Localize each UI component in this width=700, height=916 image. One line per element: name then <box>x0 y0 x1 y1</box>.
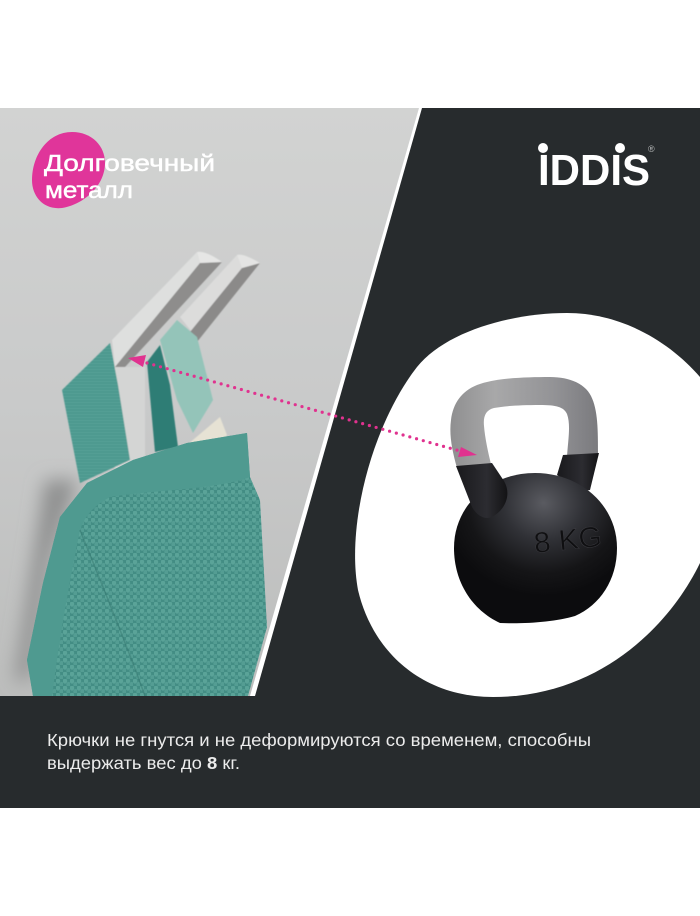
light strap <box>160 320 213 433</box>
towel top hem <box>27 433 250 696</box>
wall <box>0 108 420 696</box>
pink blob behind heading <box>32 132 105 208</box>
white blob with kettlebell <box>355 313 700 697</box>
kettlebell left sleeve <box>456 463 507 518</box>
dotted double-headed arrow <box>128 355 477 457</box>
logo IDDIS: IDDIS <box>538 146 650 195</box>
dark panel <box>0 108 700 808</box>
heading: металл <box>45 177 133 203</box>
towel body <box>27 433 267 696</box>
cream towel fold <box>190 417 227 442</box>
white diagonal divider <box>248 108 422 696</box>
back hook <box>180 255 260 342</box>
blob <box>355 313 700 697</box>
kettlebell handle <box>450 377 598 468</box>
photo: hooks with towel <box>0 108 420 696</box>
description text <box>47 730 591 773</box>
kettlebell right sleeve <box>557 453 599 491</box>
heading: Долговечный <box>44 150 215 176</box>
dark strap <box>147 345 178 452</box>
heading <box>44 150 215 203</box>
front hook <box>112 252 222 487</box>
description text: выдержать вес до 8 кг. <box>47 753 240 773</box>
logo IDDIS: ® <box>648 144 655 154</box>
wall soft shadow <box>15 480 78 680</box>
hooks and straps <box>62 252 260 487</box>
kettlebell weight label: 8 KG <box>532 521 603 560</box>
left strap <box>62 343 130 483</box>
towel inner crease <box>80 530 145 696</box>
icon: kettlebell <box>450 377 617 623</box>
description text: Крючки не гнутся и не деформируются со временем, способны <box>47 730 591 750</box>
kettlebell ball <box>454 473 617 623</box>
infographic canvas <box>0 108 700 808</box>
